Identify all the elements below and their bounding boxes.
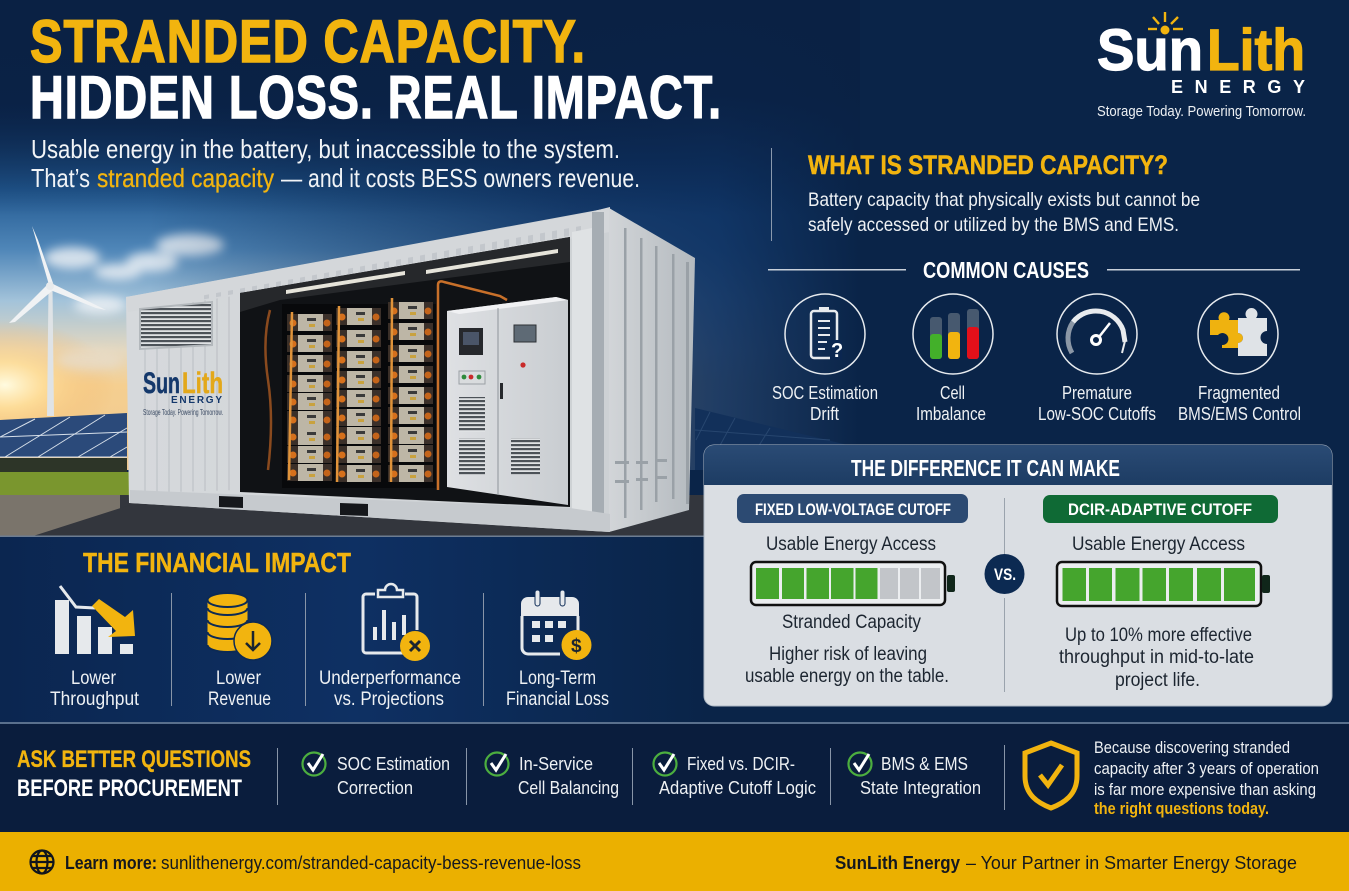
panel: the difference it can make: Up to 10% more effective [1065,625,1252,646]
footer band: SunLith Energy [835,852,961,873]
open interior [240,237,570,507]
check item 2 [486,752,619,798]
icon: sun [1148,12,1183,34]
adaptive cutoff pill: DCIR-ADAPTIVE CUTOFF [1068,500,1252,519]
cause: premature low-SOC cutoffs: Premature [1062,383,1132,403]
footer band: Learn more: [65,853,157,873]
panel: the difference it can make: throughput in mid-to-late [1059,647,1254,668]
logo: Sun [1097,18,1203,83]
check item 1: SOC Estimation [337,753,450,774]
title [30,8,722,131]
panel: the difference it can make: project life. [1115,670,1200,691]
logo on container: ENERGY [171,395,222,406]
fixed cutoff pill: FIXED LOW-VOLTAGE CUTOFF [755,500,951,519]
heading: the financial impact: THE FINANCIAL IMPACT [83,547,351,578]
check item 3: Fixed vs. DCIR- [687,753,795,774]
cause: fragmented BMS/EMS control [1178,294,1301,424]
panel: the difference it can make: usable energy on the table. [745,666,949,687]
check item 3 [654,752,816,798]
footer band: sunlithenergy.com/stranded-capacity-bess-revenue-loss [161,853,581,873]
battery container photo [126,207,695,532]
impact: long-term financial loss [506,590,609,710]
icon: VS badge: VS. [994,565,1016,584]
impact: lower revenue [208,593,272,710]
subtitle [31,134,640,193]
cause: premature low-SOC cutoffs: Low-SOC Cutoffs [1038,404,1156,424]
impact: lower throughput: Throughput [50,689,140,710]
check item 1 [302,752,450,798]
cause: fragmented BMS/EMS control: BMS/EMS Control [1178,404,1301,424]
fixed cutoff pill [737,494,968,523]
battery racks [265,281,507,490]
adaptive cutoff pill [1043,495,1278,523]
wind turbine [9,226,106,416]
panel header [704,445,1332,485]
logo: ENERGY [1171,77,1305,97]
check item 2: In-Service [519,753,593,774]
footer band [0,832,1349,891]
container front wall [126,208,609,532]
panel: the difference it can make: Usable Energy Access [1072,534,1245,555]
impact: underperformance vs. projections [319,584,461,710]
check item 1: Correction [337,777,413,798]
cause: cell imbalance: Cell [940,383,965,403]
logo: Storage Today. Powering Tomorrow. [1097,103,1306,120]
cause: cell imbalance [913,294,993,424]
cause: fragmented BMS/EMS control: Fragmented [1198,383,1280,403]
solar panels right [695,408,860,470]
subtitle: Usable energy in the battery, but inaccessible to the system. [31,134,620,164]
subtitle: stranded capacity [97,163,274,193]
check item 4 [848,752,981,798]
solar panels left [0,413,127,457]
text: closing note: the right questions today. [1094,800,1269,818]
icon: shield [1025,743,1077,808]
impact: long-term financial loss: Financial Loss [506,689,609,710]
subtitle: That’s [31,163,90,193]
door hardware [615,228,689,518]
cause: premature low-SOC cutoffs [1038,294,1156,424]
panel: what is stranded capacity: Battery capacity that physically exists but cannot be [808,189,1200,211]
logo on container: Lith [182,367,223,400]
cause: cell imbalance: Imbalance [916,404,986,424]
check item 3: Adaptive Cutoff Logic [659,777,816,798]
panel header: THE DIFFERENCE IT CAN MAKE [851,455,1120,481]
panel: the difference it can make [704,445,1332,706]
text: closing note: Because discovering stranded [1094,739,1290,757]
cause: SOC estimation drift [772,294,878,424]
title: STRANDED CAPACITY. [30,8,586,75]
panel: what is stranded capacity [771,148,1200,241]
heading: ask better questions: BEFORE PROCUREMENT [17,775,242,802]
impact: lower revenue: Revenue [208,689,271,710]
icon: VS badge [984,554,1024,594]
icon: globe [30,850,54,874]
power conversion cabinet [447,297,568,505]
logo: Lith [1207,18,1305,83]
check item 4: State Integration [860,777,981,798]
heading: ask better questions: ASK BETTER QUESTIONS [17,746,251,773]
corrugated roof rail [126,207,610,312]
container base rail [130,490,610,532]
logo on container [143,367,223,417]
panel: what is stranded capacity: WHAT IS STRANDED CAPACITY? [808,150,1168,180]
text: closing note: capacity after 3 years of operation [1094,760,1319,778]
title: HIDDEN LOSS. REAL IMPACT. [30,64,722,131]
impact: underperformance vs. projections: Underperformance [319,668,461,689]
footer band: – Your Partner in Smarter Energy Storage [966,852,1297,873]
logo on container: Storage Today. Powering Tomorrow. [143,408,223,417]
panel: the difference it can make: Stranded Capacity [782,612,921,633]
container open side door [609,208,695,532]
impact: lower throughput: Lower [71,668,117,689]
impact: long-term financial loss: $ [571,636,582,657]
impact: underperformance vs. projections: vs. Projections [334,689,444,710]
vent [140,302,212,349]
logo [1097,12,1306,120]
heading: common causes: COMMON CAUSES [923,257,1089,283]
text: closing note: is far more expensive than asking [1094,781,1316,799]
check item 2: Cell Balancing [518,777,619,798]
ceiling lights [286,249,558,294]
battery: partial [751,562,955,605]
heading: ask better questions [17,746,251,802]
cause: SOC estimation drift: SOC Estimation [772,383,878,403]
logo on container: Sun [143,367,180,400]
battery: full [1057,562,1270,606]
band: ask better questions [0,722,1349,832]
check item 4: BMS & EMS [881,753,968,774]
impact: long-term financial loss: Long-Term [519,668,596,689]
subtitle: — and it costs BESS owners revenue. [281,163,640,193]
cause: SOC estimation drift: Drift [810,404,839,424]
panel: what is stranded capacity: safely accessed or utilized by the BMS and EMS. [808,214,1179,236]
panel: the difference it can make: Usable Energy Access [766,534,936,555]
text: closing note [1094,739,1319,818]
cause: SOC estimation drift: ? [831,340,843,362]
impact: lower revenue: Lower [216,668,262,689]
panel: the difference it can make: Higher risk of leaving [769,644,927,665]
impact: lower throughput [50,586,140,710]
